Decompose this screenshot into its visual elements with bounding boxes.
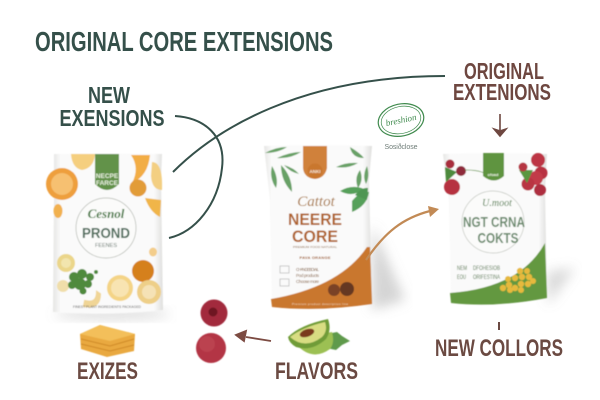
copper base panel xyxy=(271,247,372,309)
pouch: middle: NEERE xyxy=(288,210,342,229)
arrow: middle pouch to right pouch xyxy=(366,206,439,260)
pouch: right: COKTS xyxy=(478,230,518,247)
fruit illustrations xyxy=(46,154,162,306)
dates xyxy=(328,284,340,296)
pouch: middle: PREMIUM FOOD NATURAL xyxy=(293,245,337,249)
pouch: left: FINEST PLANT INGREDIENTS PACKAGED xyxy=(73,305,141,309)
green header tab xyxy=(483,153,504,180)
label: original extensions xyxy=(453,58,551,105)
label: new extensions xyxy=(60,82,164,131)
title: ORIGINAL CORE EXTENSIONS xyxy=(35,26,333,57)
arrow: flavors to plums xyxy=(236,331,271,341)
tick mark above new collors xyxy=(498,322,500,330)
label: new extensions: NEW xyxy=(88,82,130,108)
label: new extensions: EXENSIONS xyxy=(60,105,164,131)
pouch: middle: Choose more xyxy=(296,279,319,284)
green base panel xyxy=(450,243,547,305)
icon: plum top xyxy=(200,300,228,326)
label: original extensions: ORIGINAL xyxy=(464,58,544,84)
pouch: left: FARCE xyxy=(96,180,119,187)
pouch: left: NECPE xyxy=(96,173,119,180)
arrow: down to right pouch xyxy=(494,114,506,136)
pouch: middle: Pod products xyxy=(296,273,320,278)
pouch: right: NGT CRNA xyxy=(463,214,525,231)
arrow: curve from original extensions to left pouch xyxy=(173,76,445,172)
pouch: right xyxy=(443,153,575,305)
pouch: middle xyxy=(264,145,405,310)
pouch: left: PROND xyxy=(82,225,130,242)
pouch: left: Cesnol xyxy=(88,206,125,221)
arrow: curve from new extensions to left pouch xyxy=(169,116,222,238)
icon: plum bottom xyxy=(196,333,226,363)
circle label xyxy=(76,198,136,258)
icon: avocado xyxy=(288,319,350,354)
pouch: middle: Premium product description line xyxy=(292,302,348,306)
orange header tab xyxy=(303,146,327,179)
badge: stamp logo: breshion xyxy=(385,112,418,128)
pouch: right: ofoad xyxy=(488,172,499,177)
badge: stamp logo: Sosiðclose xyxy=(384,143,418,151)
pouch: right: U.moot xyxy=(482,198,512,209)
pouch: left: FEENES xyxy=(95,243,117,249)
pouch: right: DFOHESIOB xyxy=(473,266,500,272)
pouch: right: ORIFESTINA xyxy=(473,275,500,281)
pouch: right: NEM xyxy=(457,266,467,272)
label: exizes: EXIZES xyxy=(77,358,138,385)
leaves xyxy=(265,147,369,212)
icon: wafer stack xyxy=(80,325,135,357)
green header tab xyxy=(95,154,119,190)
pouch: middle: PAVA ORANGE xyxy=(300,255,331,260)
chickpeas xyxy=(500,268,536,293)
parsley xyxy=(68,269,98,294)
badge: stamp logo xyxy=(375,100,427,151)
pouch: right: EOU xyxy=(457,275,466,281)
pouch: left xyxy=(46,154,170,319)
pouch: middle: CORE xyxy=(292,227,338,246)
pouch: middle: CHANGE BOWL xyxy=(296,267,319,272)
label: original extensions: EXTENIONS xyxy=(453,79,551,105)
berries xyxy=(444,153,548,196)
pouch: middle: Cattot xyxy=(297,194,336,210)
pouch: middle: ANKI xyxy=(310,169,320,174)
label: flavors: FLAVORS xyxy=(275,358,358,385)
